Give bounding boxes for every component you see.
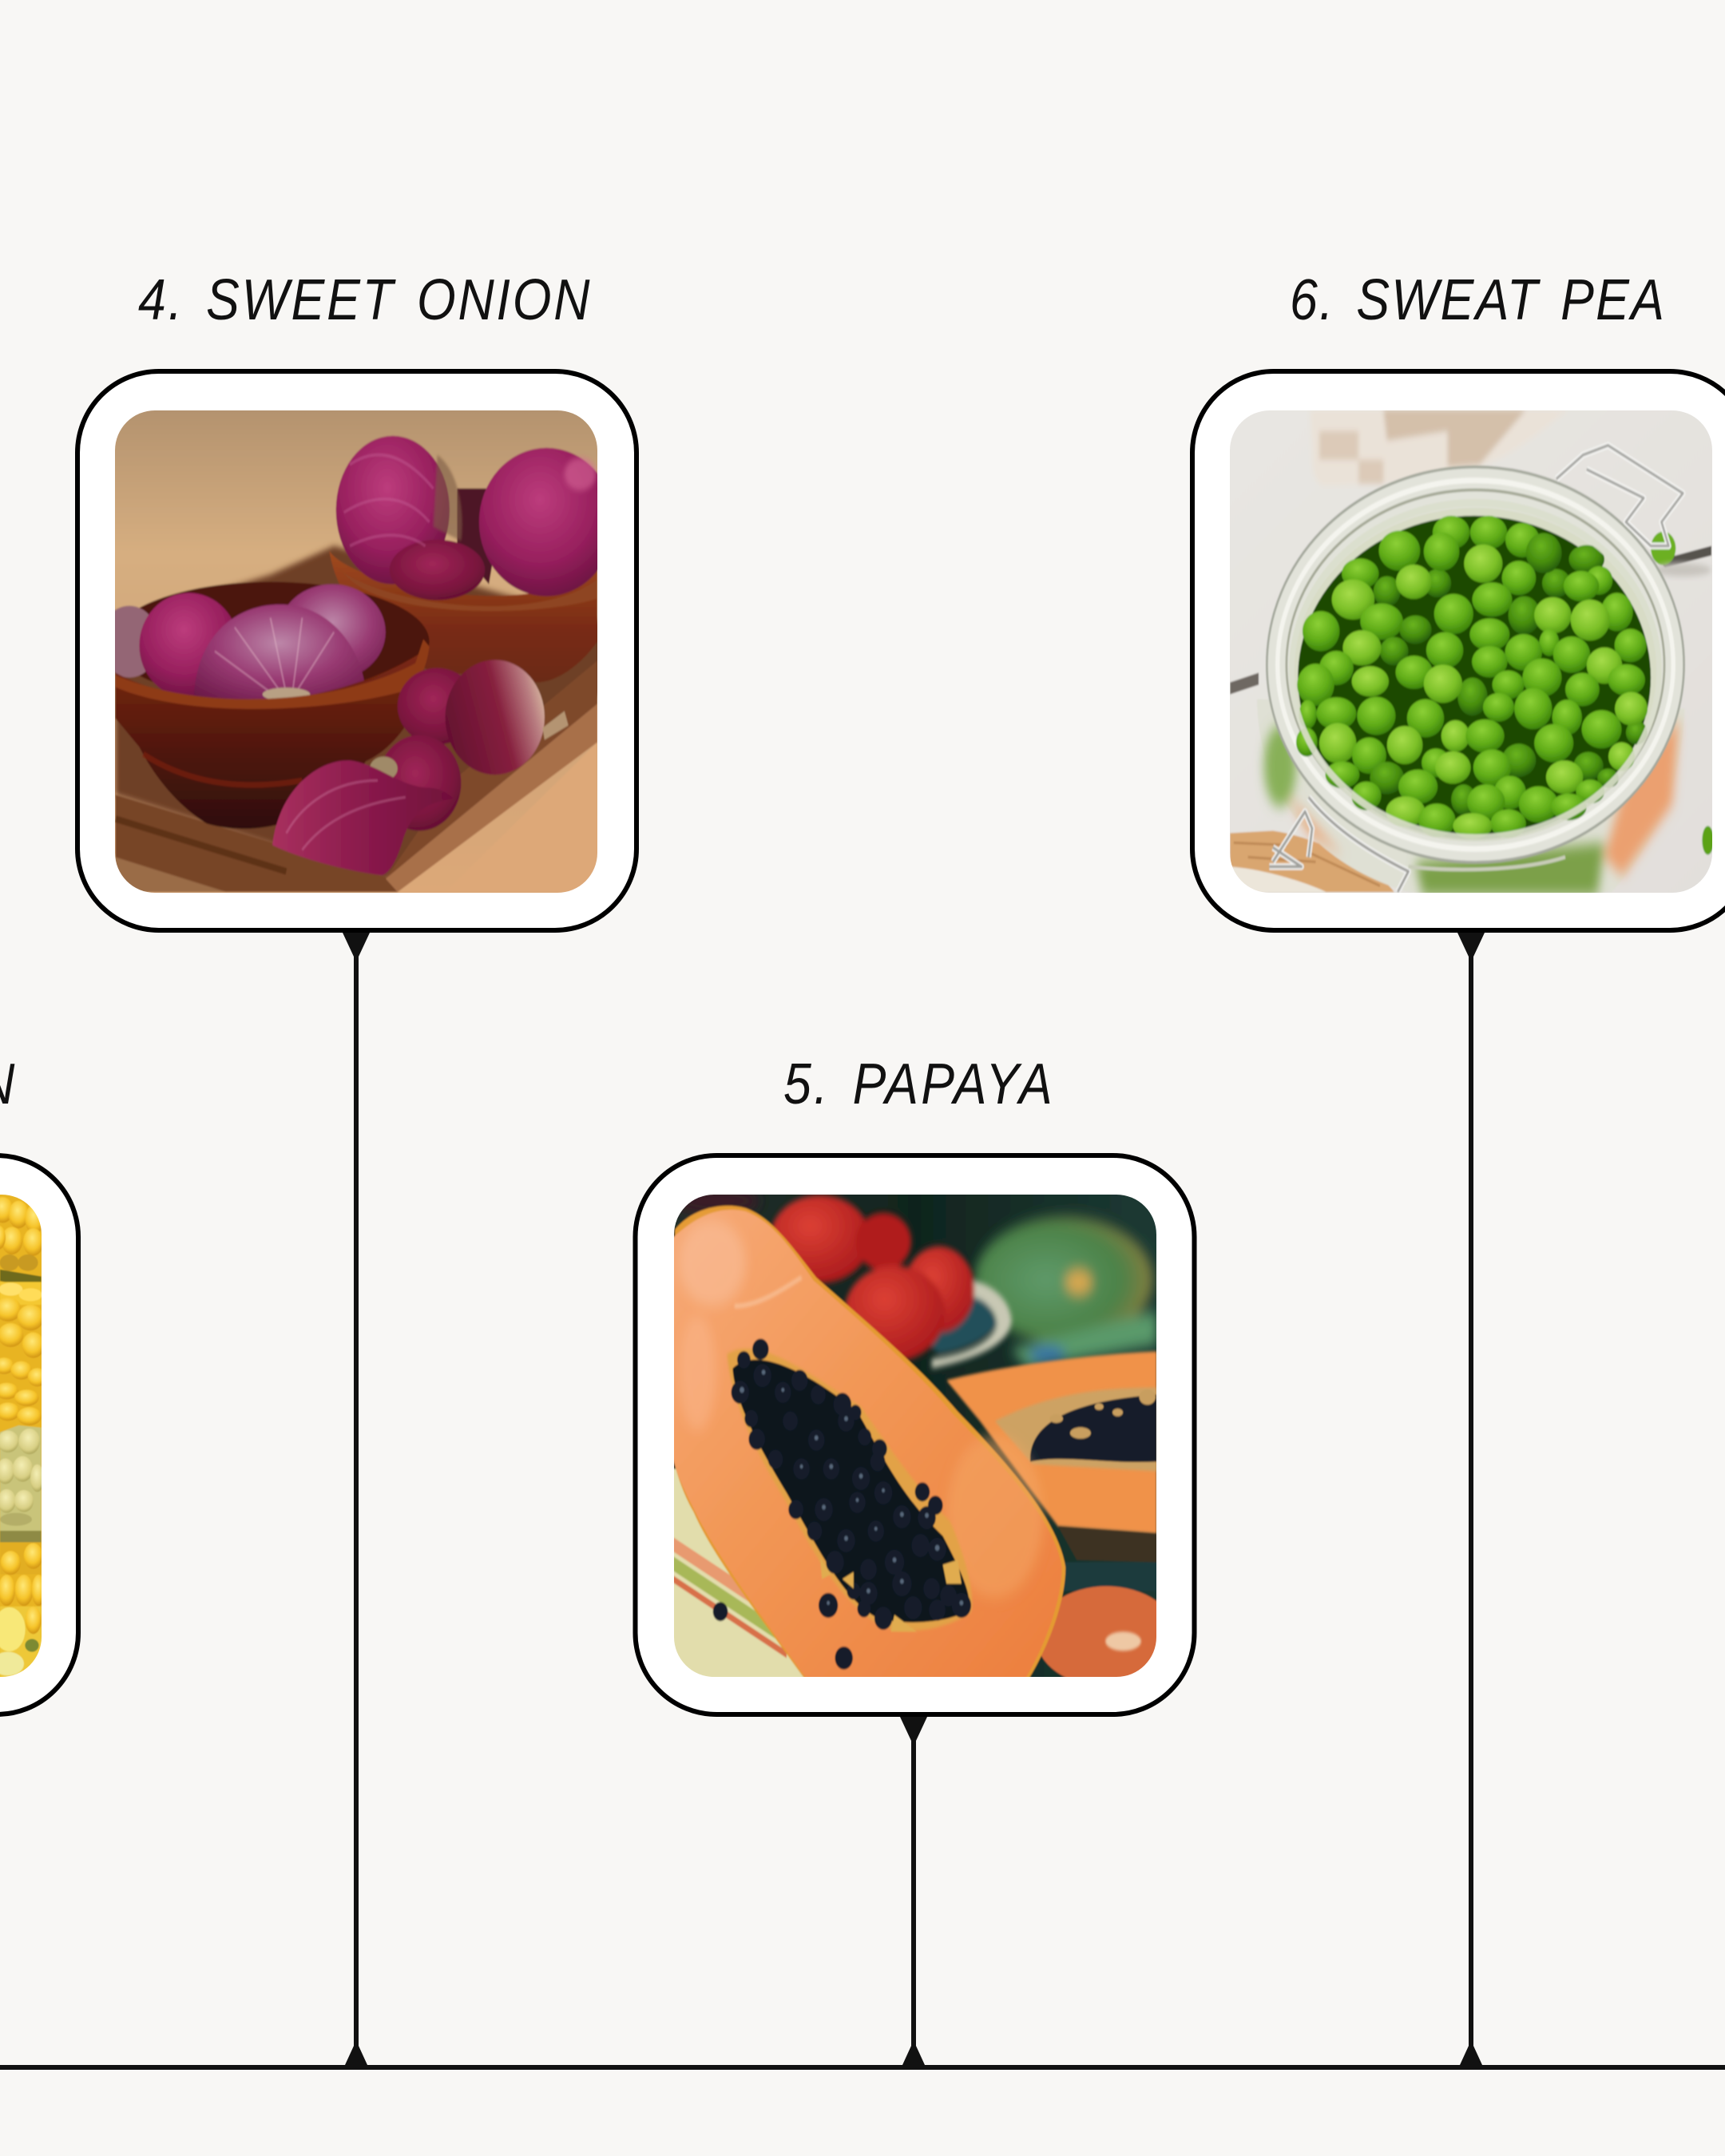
glass lip over peas	[1292, 503, 1659, 838]
pea mass	[1298, 516, 1651, 839]
photo: halved papaya	[672, 1187, 1177, 1686]
card frame: corn	[0, 1155, 78, 1714]
pointer and stem: onion	[343, 933, 370, 2065]
photo: corn cobs	[0, 1195, 42, 1677]
item 3: sweet corn	[0, 1052, 78, 1714]
back bowl onions	[336, 436, 450, 585]
timeline baseline	[0, 2065, 1725, 2070]
card frame: papaya	[636, 1155, 1195, 1714]
item 6: sweat pea	[1192, 268, 1725, 2065]
background utensils	[1230, 673, 1259, 695]
back bowl	[329, 551, 597, 683]
card frame: pea	[1192, 371, 1725, 930]
metal clasps	[1269, 446, 1683, 892]
background fruit	[672, 1187, 1156, 1369]
papaya seeds	[713, 1338, 971, 1670]
wooden lid	[1230, 830, 1394, 892]
front bowl onions	[115, 605, 149, 679]
heading: 6. sweat pea: 6. SWEAT PEA	[1290, 268, 1664, 332]
loose onions on tray	[396, 668, 462, 745]
pointer and stem: papaya	[900, 1717, 927, 2065]
cut orange	[1041, 1584, 1156, 1677]
main papaya half	[672, 1206, 1065, 1679]
second papaya half	[946, 1352, 1156, 1533]
front onion	[272, 760, 454, 875]
heading: 4. sweet onion: 4. SWEET ONION	[138, 268, 590, 332]
heading: 5. papaya: 5. PAPAYA	[783, 1052, 1053, 1116]
tray front plank	[116, 795, 398, 892]
jar rim glass	[1275, 569, 1676, 862]
item 5: papaya	[636, 1052, 1195, 2065]
front bowl body	[116, 652, 424, 829]
photo: red onions in wooden bowls	[100, 407, 614, 895]
jar body	[1257, 700, 1685, 892]
seed cavity	[727, 1349, 972, 1631]
front bowl inside	[139, 581, 430, 682]
photo: green peas in glass jar	[1227, 407, 1719, 895]
tray side plank	[386, 704, 597, 892]
card frame: onion	[77, 371, 636, 930]
pointer and stem: pea	[1457, 933, 1485, 2065]
checked cloth	[1313, 410, 1529, 486]
item 4: sweet onion	[77, 268, 636, 2065]
